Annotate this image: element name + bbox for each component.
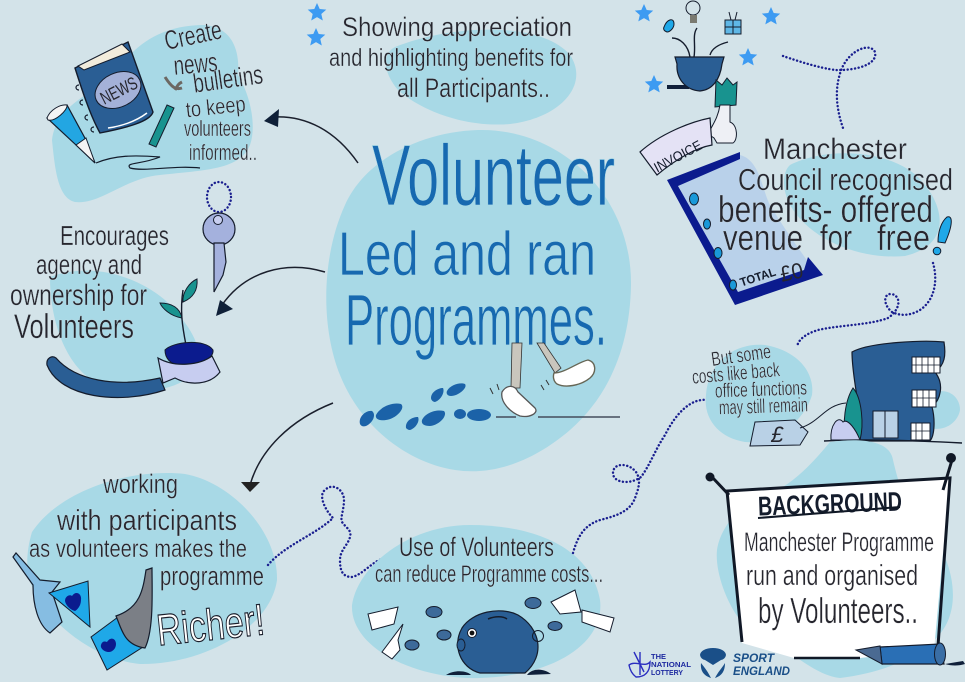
icon: invoice document [667,152,823,305]
logo: Sport England: SPORT [733,651,776,665]
participants text: working [102,469,178,499]
icon: piggy bank [446,611,551,675]
dotted line: top right loop [783,48,875,128]
logo: The National Lottery: NATIONAL [651,660,691,669]
panel: agency and ownership [10,220,220,398]
council text: for [820,217,852,258]
logo: The National Lottery [629,652,691,677]
costs text [375,532,603,588]
icon: hand holding seedling [47,279,220,398]
participants text [29,469,264,591]
news text: Create [162,15,225,56]
appreciation text [329,12,573,103]
icon: price tag [750,403,846,447]
logo: Sport England [700,648,790,678]
background text [744,527,934,631]
footprints and walking legs [360,343,620,430]
agency text: Volunteers [14,308,134,346]
icon: invoice document: £0 [778,258,805,287]
dotted line: exclamation to back office [797,263,935,347]
icon: green marker [149,77,182,147]
background heading: BACKGROUND [757,486,902,522]
icon: hand and invoice [640,78,737,175]
exclamation mark [933,217,951,255]
costs text: can reduce Programme costs... [375,561,603,588]
council text: free [877,217,930,258]
logos [629,648,790,678]
panel: background notice board [706,440,965,678]
agency text: Encourages [60,220,169,251]
news text: informed.. [189,140,257,165]
richer lettering: Richer! [154,595,267,655]
arrow: to news bulletins [264,109,358,163]
agency text: ownership for [10,279,147,312]
appreciation text: all Participants.. [397,73,550,103]
icon: invoice document: TOTAL [738,265,778,289]
news text: volunteers [184,116,251,141]
stars [307,3,326,46]
news text: news [172,47,219,81]
back office text: office functions [715,377,807,403]
appreciation text: and highlighting benefits for [329,44,573,72]
panel: news bulletins [47,15,265,202]
icon: money notes and coins [368,590,614,659]
back office text [691,341,808,419]
arrow: to agency [216,267,325,316]
stars [635,4,780,92]
back office text: costs like back [691,359,781,389]
costs text: Use of Volunteers [399,532,554,562]
panel: central circle [326,128,631,471]
participants text: programme [160,561,264,591]
panel: back office costs [691,341,962,447]
icon: hands exchanging hearts [13,553,152,670]
dotted line: costs to back office [573,400,723,553]
white board [706,453,956,658]
panel: appreciation [307,3,576,125]
council text [718,133,953,258]
appreciation text: Showing appreciation [342,12,572,42]
logo: The National Lottery: LOTTERY [651,668,683,677]
background heading [757,486,902,522]
logo: The National Lottery: THE [651,652,666,661]
icon: building [824,341,962,443]
panel: participants [13,469,277,670]
participants text: as volunteers makes the [29,535,247,563]
news text: bulletins [191,59,265,99]
logo: Sport England: ENGLAND [733,664,790,678]
icon: big pencil [794,643,965,666]
agency text [10,220,169,346]
back office text: But some [710,341,772,371]
title: Volunteer [372,128,615,224]
icon: news book: NEWS [97,73,141,108]
icon: news book [75,42,153,133]
council text: venue [723,217,803,258]
icon: blue pencil [47,105,200,169]
news text [162,15,265,165]
back office text: may still remain [719,394,808,419]
icon: plant pot with bulb, heart and gift [664,1,741,91]
news text: to keep [185,91,247,122]
title: Led and ran [338,220,596,289]
title: Programmes. [345,281,607,361]
arrow: to participants [241,403,333,492]
icon: key [203,182,235,292]
dotted line: participants to programme costs [268,487,382,577]
icon: price tag: £ [770,422,784,447]
agency text: agency and [36,249,142,280]
participants text: with participants [56,505,237,537]
council text: Manchester [763,133,907,166]
title [338,128,615,361]
panel: council venue [635,1,953,305]
panel: programme costs [352,525,614,678]
icon: hand and invoice: INVOICE [651,137,704,175]
